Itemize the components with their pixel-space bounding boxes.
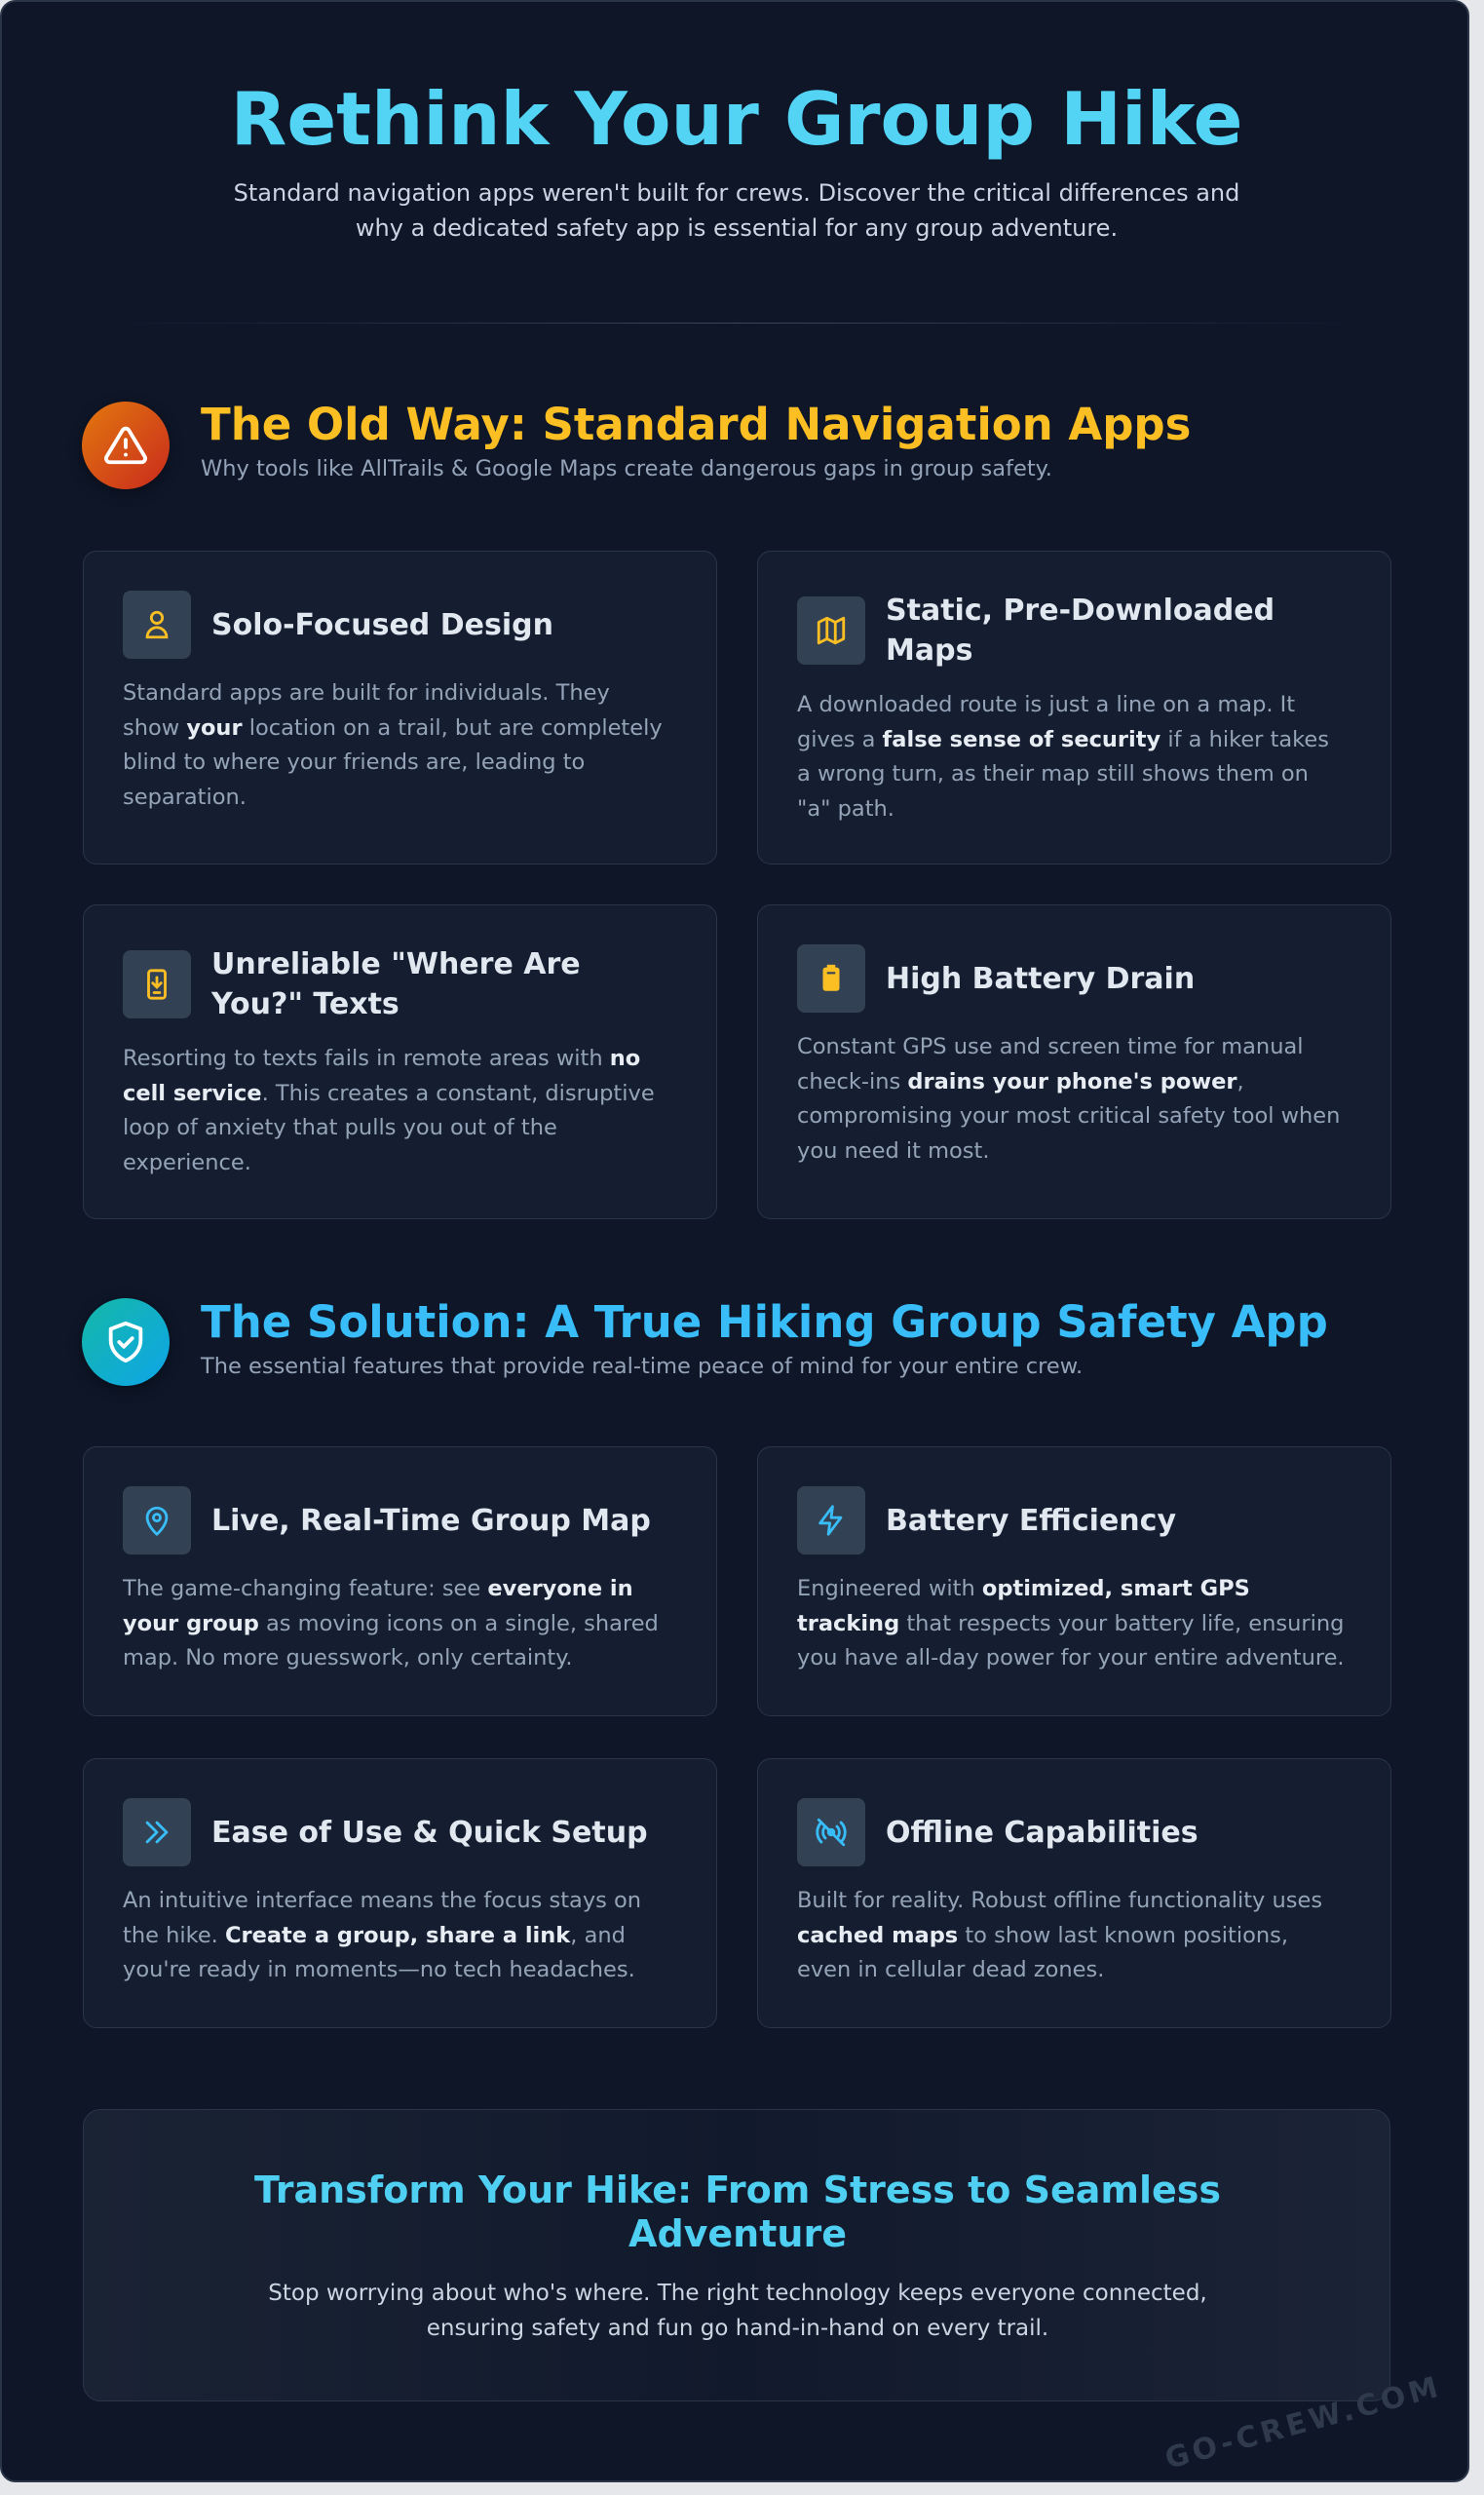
panel: unreliable texts: Resorting to texts fails in remote areas with no cell service. This creates a constant, disruptive loop of anxiety that pulls you out of the experience. [123, 1046, 655, 1175]
panel: live map [83, 1446, 717, 1716]
panel: offline: Built for reality. Robust offline functionality uses cached maps to show last known positions, even in cellular dead zones. [797, 1888, 1322, 1982]
panel: offline: Offline Capabilities [886, 1815, 1199, 1850]
panel: battery efficiency: Battery Efficiency [886, 1503, 1176, 1538]
panel: offline [757, 1758, 1391, 2028]
icon: bolt [797, 1486, 865, 1555]
panel: live map: Live, Real-Time Group Map [211, 1503, 651, 1538]
panel: unreliable texts [83, 904, 717, 1219]
callout text: Stop worrying about who's where. The right technology keeps everyone connected, ensuring safety and fun go hand-in-hand on every trail. [268, 2281, 1207, 2341]
panel: battery drain: High Battery Drain [886, 961, 1195, 996]
panel: static maps: Static, Pre-Downloaded Maps [886, 594, 1275, 668]
panel: ease of use: An intuitive interface means the focus stays on the hike. Create a group, share a link, and you're ready in moments—no tech headaches. [123, 1888, 641, 1982]
icon: map [797, 596, 865, 665]
panel: battery drain: Constant GPS use and screen time for manual check-ins drains your phone's power, compromising your most critical safety tool when you need it most. [797, 1034, 1340, 1164]
panel: solo-focused design: Solo-Focused Design [211, 608, 553, 641]
panel: battery efficiency [757, 1446, 1391, 1716]
icon: warning circle [82, 402, 170, 489]
watermark: GO-CREW.COM [1161, 2369, 1445, 2476]
icon: person [123, 591, 191, 659]
panel: solo-focused design: Standard apps are built for individuals. They show your location on a trail, but are completely blind to where your friends are, leading to separation. [123, 680, 663, 809]
panel: live map: The game-changing feature: see everyone in your group as moving icons on a single, shared map. No more guesswork, only certainty. [123, 1576, 659, 1670]
subtitle: Standard navigation apps weren't built for crews. Discover the critical differences and why a dedicated safety app is essential for any group adventure. [234, 179, 1239, 242]
heading: old way: Why tools like AllTrails & Google Maps create dangerous gaps in group safety. [201, 456, 1052, 481]
title: Rethink Your Group Hike [231, 76, 1242, 162]
panel: ease of use: Ease of Use & Quick Setup [211, 1815, 648, 1850]
callout heading: Transform Your Hike: From Stress to Seamless Adventure [254, 2169, 1221, 2255]
icon: battery [797, 944, 865, 1013]
icon: phone [123, 950, 191, 1018]
callout: transform your hike [83, 2109, 1390, 2401]
heading: solution: The essential features that provide real-time peace of mind for your entire crew. [201, 1354, 1083, 1379]
panel: battery drain [757, 904, 1391, 1219]
icon: shield circle [82, 1298, 170, 1386]
icon: pin [123, 1486, 191, 1555]
panel: unreliable texts: Unreliable "Where Are You?" Texts [211, 947, 581, 1021]
panel: static maps [757, 551, 1391, 864]
heading: old way [201, 399, 1191, 481]
icon: chevrons [123, 1798, 191, 1866]
icon: no signal [797, 1798, 865, 1866]
panel: ease of use [83, 1758, 717, 2028]
heading: solution [201, 1296, 1328, 1379]
heading: solution: The Solution: A True Hiking Group Safety App [201, 1296, 1328, 1348]
panel: static maps: A downloaded route is just a line on a map. It gives a false sense of security if a hiker takes a wrong turn, as their map still shows them on "a" path. [797, 692, 1329, 821]
panel: battery efficiency: Engineered with optimized, smart GPS tracking that respects your battery life, ensuring you have all-day power for your entire adventure. [797, 1576, 1345, 1670]
heading: old way: The Old Way: Standard Navigation Apps [201, 399, 1191, 450]
panel: solo-focused design [83, 551, 717, 864]
